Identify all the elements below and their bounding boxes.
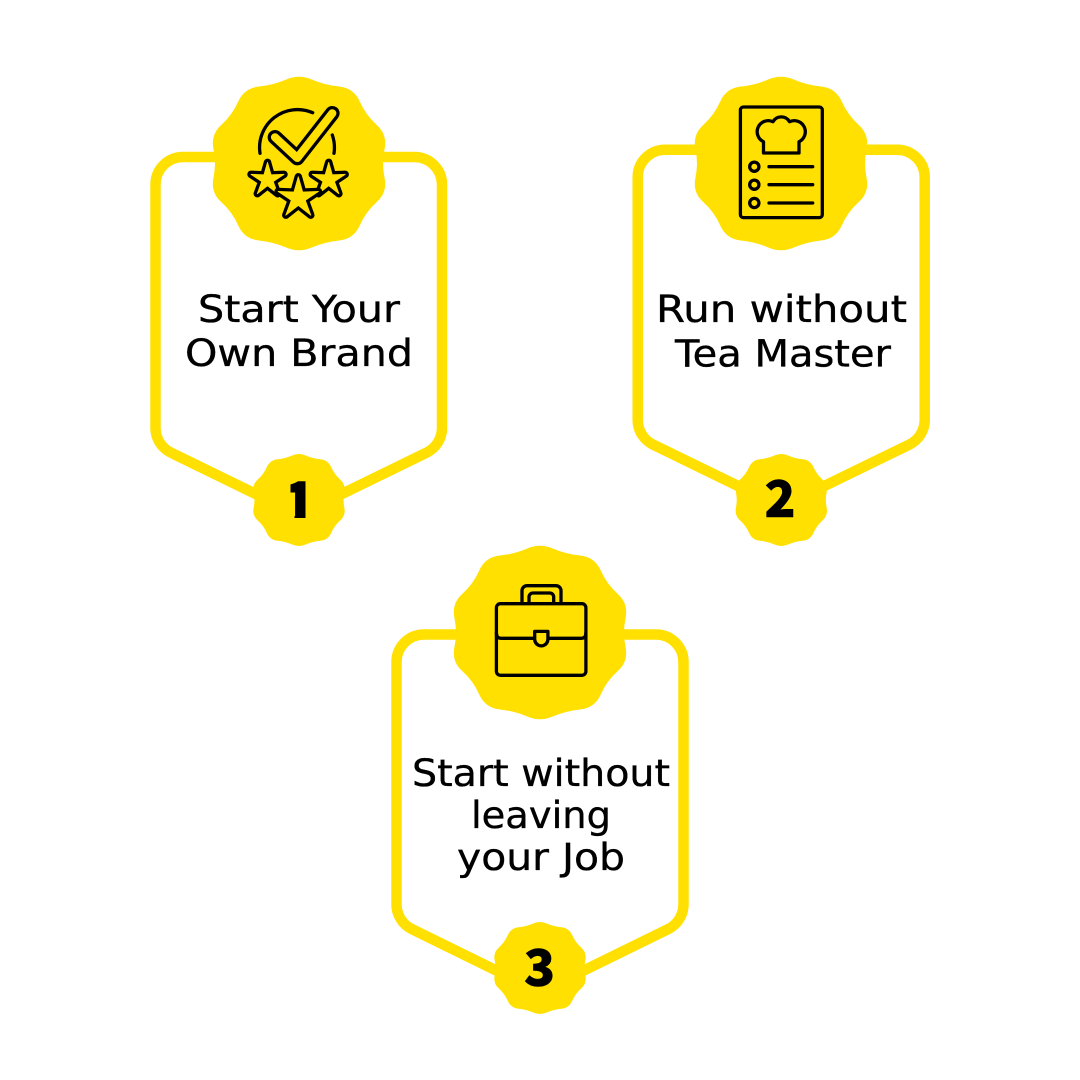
heading 3: Start without	[412, 752, 670, 795]
heading 2	[656, 288, 907, 376]
panel: run without tea master	[638, 77, 925, 546]
number badge 1: 1	[281, 456, 318, 543]
heading 2: Tea Master	[674, 332, 892, 376]
badge 3	[454, 546, 626, 719]
badge 2	[695, 77, 867, 250]
number badge 1	[253, 454, 345, 546]
icon: chef hat menu	[740, 107, 822, 218]
number badge 2	[736, 454, 827, 546]
frame 2	[638, 150, 925, 507]
badge 1	[213, 77, 385, 250]
heading 1	[185, 288, 413, 375]
heading 3: leaving	[471, 794, 611, 837]
icon: check mark with three stars	[251, 110, 345, 215]
panel: start without leaving your job	[396, 546, 684, 1014]
panel: start your own brand	[156, 77, 442, 546]
heading 3	[412, 752, 670, 879]
number badge 3: 3	[524, 927, 555, 1001]
heading 1: Own Brand	[185, 332, 413, 375]
heading 1: Start Your	[198, 288, 401, 331]
number badge 2: 2	[764, 458, 796, 532]
frame 3	[396, 634, 684, 992]
heading 3: your Job	[457, 836, 625, 879]
icon: briefcase	[496, 586, 586, 675]
heading 2: Run without	[656, 288, 907, 331]
number badge 3	[494, 922, 586, 1014]
frame 1	[156, 157, 442, 515]
